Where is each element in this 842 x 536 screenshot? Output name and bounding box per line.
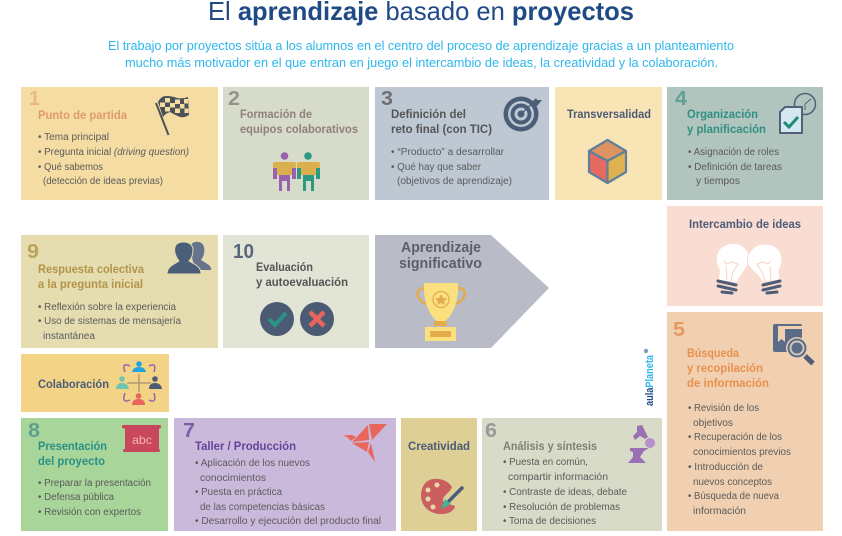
number 1: 1 xyxy=(29,88,40,110)
heading: evaluación: Evaluación xyxy=(256,260,313,274)
list: búsqueda: • Introducción de xyxy=(688,462,763,473)
heading: aprendizaje significativo: Aprendizaje xyxy=(401,239,481,256)
list: organización: • Definición de tareas xyxy=(688,162,782,173)
heading: presentación: Presentación xyxy=(38,439,107,453)
logo: aulaPlaneta: aulaPlaneta xyxy=(644,354,656,406)
list: presentación: • Defensa pública xyxy=(38,492,114,503)
panel: 3 definición del reto xyxy=(375,87,549,200)
list: reto final: • Qué hay que saber xyxy=(391,162,482,173)
number 3: 3 xyxy=(381,88,393,110)
heading: evaluación xyxy=(256,260,348,289)
panel: 1 punto de partida xyxy=(21,87,218,200)
list: organización: y tiempos xyxy=(696,176,740,187)
icon: trophy xyxy=(418,283,465,341)
panel: 8 presentación del proyecto xyxy=(21,418,168,531)
panel: 4 organización y planificación xyxy=(667,87,823,200)
list: reto final xyxy=(391,147,512,187)
list: punto de partida: (detección de ideas previas) xyxy=(43,176,163,187)
icon: checkered flag xyxy=(156,96,189,135)
list: búsqueda: • Revisión de los xyxy=(688,403,759,414)
icon: two people xyxy=(273,152,320,191)
heading: presentación: del proyecto xyxy=(38,454,105,468)
list: búsqueda: nuevos conceptos xyxy=(693,477,772,488)
list: búsqueda: información xyxy=(693,506,746,517)
panel: 6 análisis y síntesis xyxy=(482,418,662,531)
panel: 5 búsqueda y recopilación xyxy=(667,312,823,531)
heading: definición del reto final xyxy=(391,107,492,136)
number 9: 9 xyxy=(27,241,39,263)
list: presentación xyxy=(38,478,151,518)
icon: four people and plus xyxy=(116,361,162,405)
heading: organización: y planificación xyxy=(687,122,766,136)
list: organización: • Asignación de roles xyxy=(688,147,779,158)
number 5: 5 xyxy=(673,319,685,341)
list: análisis: • Contraste de ideas, debate xyxy=(503,487,627,498)
icon: two silhouettes xyxy=(167,242,211,274)
list: respuesta colectiva: instantánea xyxy=(43,331,95,342)
panel: 9 respuesta colectiva xyxy=(21,235,218,348)
panel: creatividad xyxy=(401,418,477,531)
list: búsqueda: • Recuperación de los xyxy=(688,432,782,443)
heading: definición del reto final: Definición del xyxy=(391,107,466,121)
heading: formación de equipos xyxy=(240,107,358,136)
heading: formación de equipos: Formación de xyxy=(240,107,312,121)
list: punto de partida: • Tema principal xyxy=(38,132,109,143)
number 7: 7 xyxy=(183,420,195,442)
list: presentación: • Revisión con expertos xyxy=(38,507,141,518)
heading: punto de partida: Punto de partida xyxy=(38,108,127,122)
list: taller: conocimientos xyxy=(200,473,266,484)
list: organización xyxy=(688,147,782,187)
number 4: 4 xyxy=(675,88,688,110)
icon: abc board xyxy=(122,425,161,452)
panel: 7 taller producción xyxy=(174,418,396,531)
heading: análisis y síntesis: Análisis y síntesis xyxy=(503,439,597,453)
list: respuesta colectiva: • Uso de sistemas de mensajería xyxy=(38,316,181,327)
list: reto final: • “Producto” a desarrollar xyxy=(391,147,505,158)
heading: respuesta colectiva: a la pregunta inicial xyxy=(38,277,143,291)
list: análisis xyxy=(503,457,627,527)
list: taller: • Puesta en práctica xyxy=(195,487,282,498)
panel: 10 evaluación xyxy=(223,235,369,348)
heading: búsqueda xyxy=(687,346,769,390)
heading: intercambio de ideas: Intercambio de ideas xyxy=(689,217,801,231)
list: taller: • Aplicación de los nuevos xyxy=(195,458,310,469)
intro text xyxy=(108,38,734,70)
panel: aprendizaje significativo arrow xyxy=(375,235,549,348)
heading: transversalidad: Transversalidad xyxy=(567,107,651,121)
intro text: El trabajo por proyectos sitúa a los alumnos en el centro del proceso de aprendizaje gracias a un planteamiento xyxy=(108,38,734,53)
heading: respuesta colectiva xyxy=(38,262,144,291)
panel: transversalidad xyxy=(555,87,662,200)
icon: book and magnifier xyxy=(773,324,813,364)
heading: definición del reto final: reto final (con TIC) xyxy=(391,122,492,136)
icon: light bulbs xyxy=(717,244,782,293)
number 10: 10 xyxy=(233,241,254,263)
heading: formación de equipos: equipos colaborativos xyxy=(240,122,358,136)
panel: 2 equipos colaborativos xyxy=(223,87,369,200)
icon: abc board: abc xyxy=(132,433,152,447)
list: respuesta colectiva xyxy=(38,302,181,342)
heading: búsqueda: y recopilación xyxy=(687,361,763,375)
icon: check mark xyxy=(260,302,294,336)
panel: colaboración xyxy=(21,354,169,412)
heading: evaluación: y autoevaluación xyxy=(256,275,348,289)
icon: microscope xyxy=(628,425,655,463)
list: punto de partida: • Pregunta inicial (driving question) xyxy=(38,147,189,158)
icon: cube xyxy=(589,140,626,183)
list: análisis: compartir información xyxy=(508,472,608,483)
icon: clipboard and clock xyxy=(780,94,816,133)
heading: colaboración: Colaboración xyxy=(38,377,109,391)
number 2: 2 xyxy=(228,88,240,110)
heading: taller producción: Taller / Producción xyxy=(195,439,296,453)
heading: organización: Organización xyxy=(687,107,758,121)
list: búsqueda: objetivos xyxy=(693,418,733,429)
list: presentación: • Preparar la presentación xyxy=(38,478,151,489)
heading: aprendizaje significativo: significativo xyxy=(399,255,482,272)
list: búsqueda xyxy=(688,403,791,517)
panel: intercambio de ideas xyxy=(667,206,823,306)
icon: target xyxy=(504,96,542,132)
list: análisis: • Resolución de problemas xyxy=(503,502,620,513)
heading: búsqueda: Búsqueda xyxy=(687,346,739,360)
heading: presentación xyxy=(38,439,107,468)
list: análisis: • Puesta en común, xyxy=(503,457,588,468)
heading: búsqueda: de información xyxy=(687,376,769,390)
list: taller: • Desarrollo y ejecución del producto final xyxy=(195,516,381,527)
list: reto final: (objetivos de aprendizaje) xyxy=(397,176,512,187)
list: taller xyxy=(195,458,381,527)
icon: origami bird xyxy=(343,424,387,462)
icon: cross mark xyxy=(300,302,334,336)
list: respuesta colectiva: • Reflexión sobre la experiencia xyxy=(38,302,176,313)
list: taller: de las competencias básicas xyxy=(200,502,325,513)
heading: organización xyxy=(687,107,766,136)
intro text: mucho más motivador en el que entran en juego el intercambio de ideas, la creatividad y la colaboración. xyxy=(125,55,718,70)
list: punto de partida: • Qué sabemos xyxy=(38,162,103,173)
list: búsqueda: conocimientos previos xyxy=(693,447,791,458)
heading: aprendizaje significativo xyxy=(399,239,482,272)
icon: palette and brush xyxy=(421,479,462,514)
number 8: 8 xyxy=(28,420,40,442)
list: punto de partida xyxy=(38,132,189,187)
number 6: 6 xyxy=(485,420,497,442)
heading: creatividad: Creatividad xyxy=(408,439,470,453)
heading: respuesta colectiva: Respuesta colectiva xyxy=(38,262,144,276)
list: búsqueda: • Búsqueda de nueva xyxy=(688,491,779,502)
list: análisis: • Toma de decisiones xyxy=(503,516,596,527)
